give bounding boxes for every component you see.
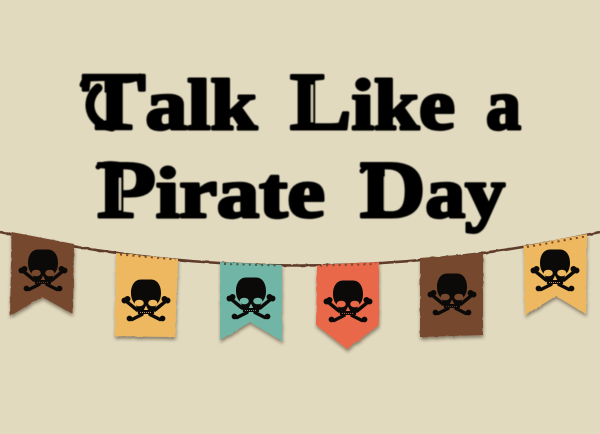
title word: Pirate: Pirate: [97, 144, 325, 235]
title word: a: a: [486, 65, 521, 145]
flag 3: teal swallowtail: [220, 262, 282, 341]
flag 4: red pointed: [316, 262, 379, 349]
flag 5: brown rectangle: [420, 253, 483, 337]
flag 6: yellow swallowtail: [524, 234, 587, 315]
bunting rope: [0, 232, 600, 266]
title word: Like: Like: [290, 56, 455, 147]
flag 1: brown swallowtail: [10, 232, 74, 316]
title word: Talk: Talk: [82, 56, 257, 147]
title: [82, 56, 521, 235]
flag 2: yellow rectangle: [115, 253, 178, 337]
title word: Day: Day: [360, 144, 505, 235]
